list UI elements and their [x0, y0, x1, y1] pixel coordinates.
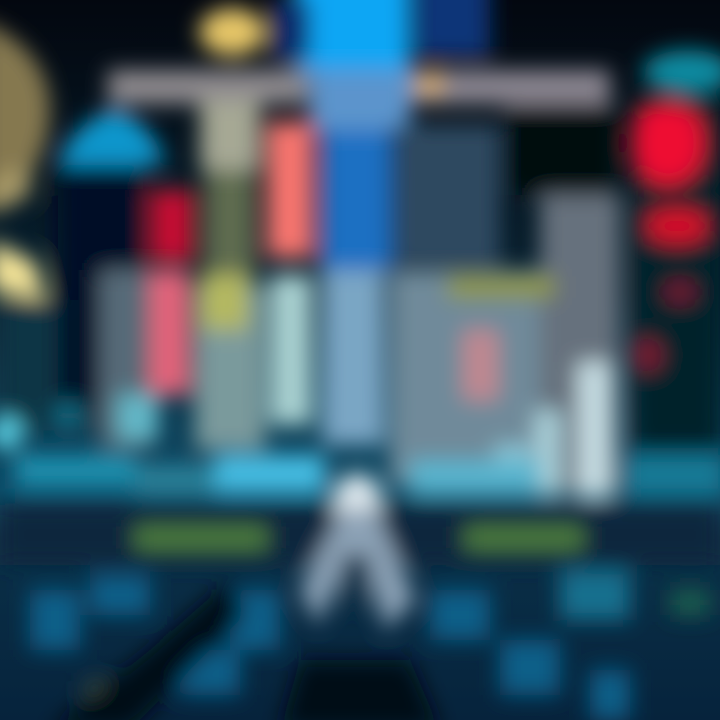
pink accent: [463, 330, 498, 400]
icon: large red circle: [632, 101, 704, 185]
top banner: blue light column: [270, 0, 490, 70]
dark diagonal left: [50, 580, 245, 720]
white arch figure: [300, 474, 415, 630]
panel: dark right block: [505, 105, 615, 195]
bottom blotches: [30, 570, 710, 720]
lower grey panel right: [390, 195, 620, 495]
green label left: [135, 526, 267, 550]
panel: salmon column: [267, 122, 313, 258]
olive accent: [200, 275, 248, 330]
green label right: [465, 526, 583, 550]
icon: gold disc: [199, 8, 265, 56]
left edge gold curve: [0, 20, 50, 300]
panel: muted olive column: [200, 100, 260, 285]
icon: teal top right: [643, 50, 720, 94]
cyan band: [0, 395, 720, 495]
dark centre wedge: [280, 660, 440, 720]
yellow strip: [448, 276, 554, 298]
icon: red oval: [645, 209, 709, 243]
icon: small red dot: [665, 282, 695, 302]
panel: red and pink column: [150, 190, 194, 395]
panel: blue column: [320, 130, 392, 445]
left side dark panel: [0, 300, 100, 430]
panel: slate column: [395, 125, 500, 265]
lower grey panel left: [100, 270, 312, 450]
icon: teal cap: [58, 108, 165, 165]
icon: small dark red dot: [630, 339, 662, 371]
title band: [108, 70, 610, 130]
right dark column: [632, 100, 720, 450]
panel: dark navy column: [58, 165, 143, 405]
lower section dark band: [0, 505, 720, 565]
pale bars: [495, 362, 610, 497]
